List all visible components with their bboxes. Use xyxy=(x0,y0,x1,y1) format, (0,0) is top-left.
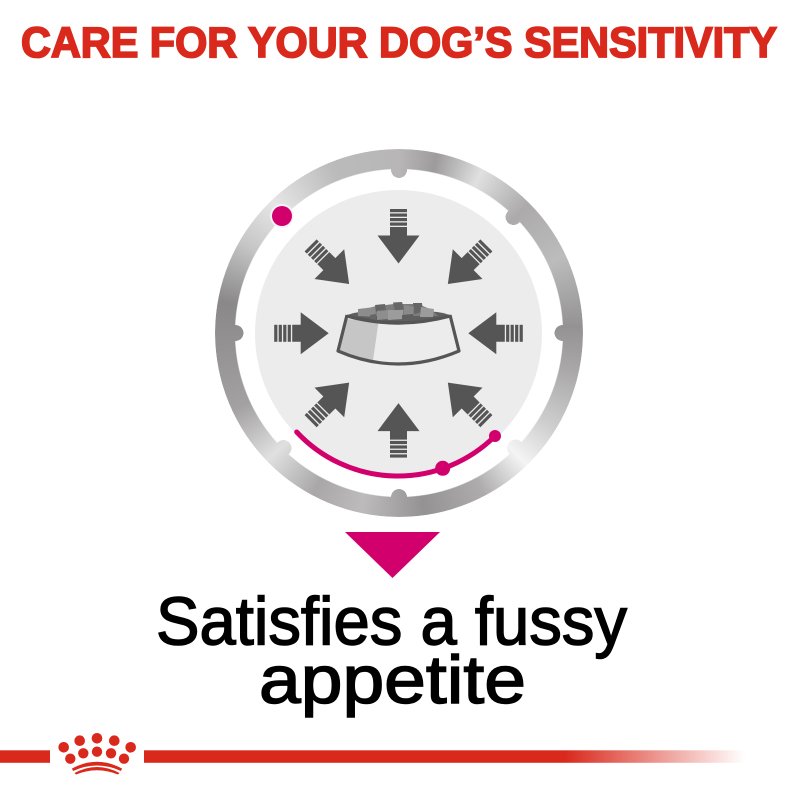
headline xyxy=(156,585,628,718)
food bowl xyxy=(338,302,459,364)
metallic ring xyxy=(214,149,582,517)
inner disc xyxy=(255,190,542,477)
title: CARE FOR YOUR DOG’S SENSITIVITY xyxy=(21,19,777,67)
pink dot xyxy=(270,204,294,228)
headline: Satisfies a fussy xyxy=(156,585,627,660)
pink arc xyxy=(297,430,501,476)
footer rule with crown logo xyxy=(0,733,738,774)
badge: bowl with inward arrows xyxy=(215,149,583,517)
headline: appetite xyxy=(259,642,526,718)
pointer triangle xyxy=(345,532,440,578)
badge artwork xyxy=(255,190,542,478)
crown logo xyxy=(58,733,136,774)
arrows xyxy=(274,209,523,458)
